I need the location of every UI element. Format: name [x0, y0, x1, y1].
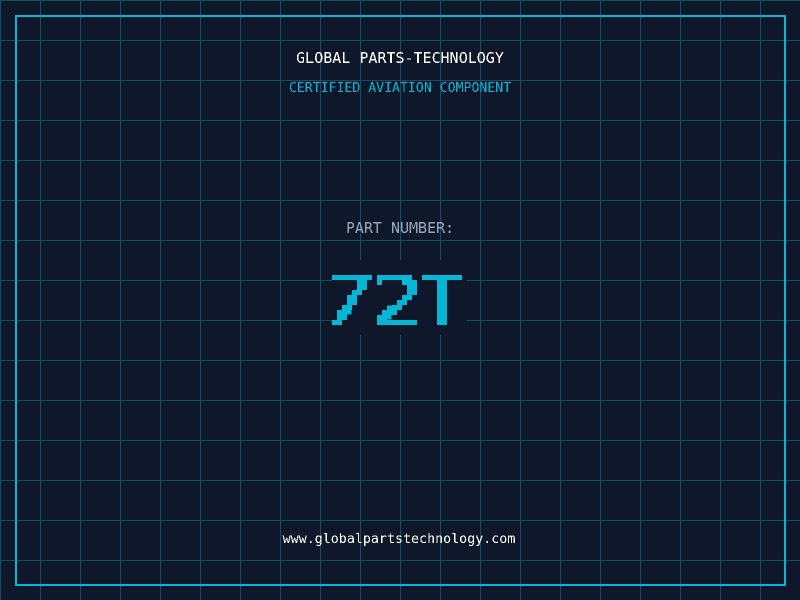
part number value: 7 — [315, 262, 380, 342]
title: GLOBAL PARTS-TECHNOLOGY — [296, 49, 504, 67]
part number label: PART NUMBER: — [346, 219, 454, 237]
subtitle: CERTIFIED AVIATION COMPONENT — [289, 81, 511, 96]
part number backdrop — [332, 260, 467, 335]
part number value — [315, 262, 463, 342]
part number value: 2 — [369, 262, 424, 342]
website url: www.globalpartstechnology.com — [283, 532, 515, 547]
part number value: T — [421, 262, 463, 342]
